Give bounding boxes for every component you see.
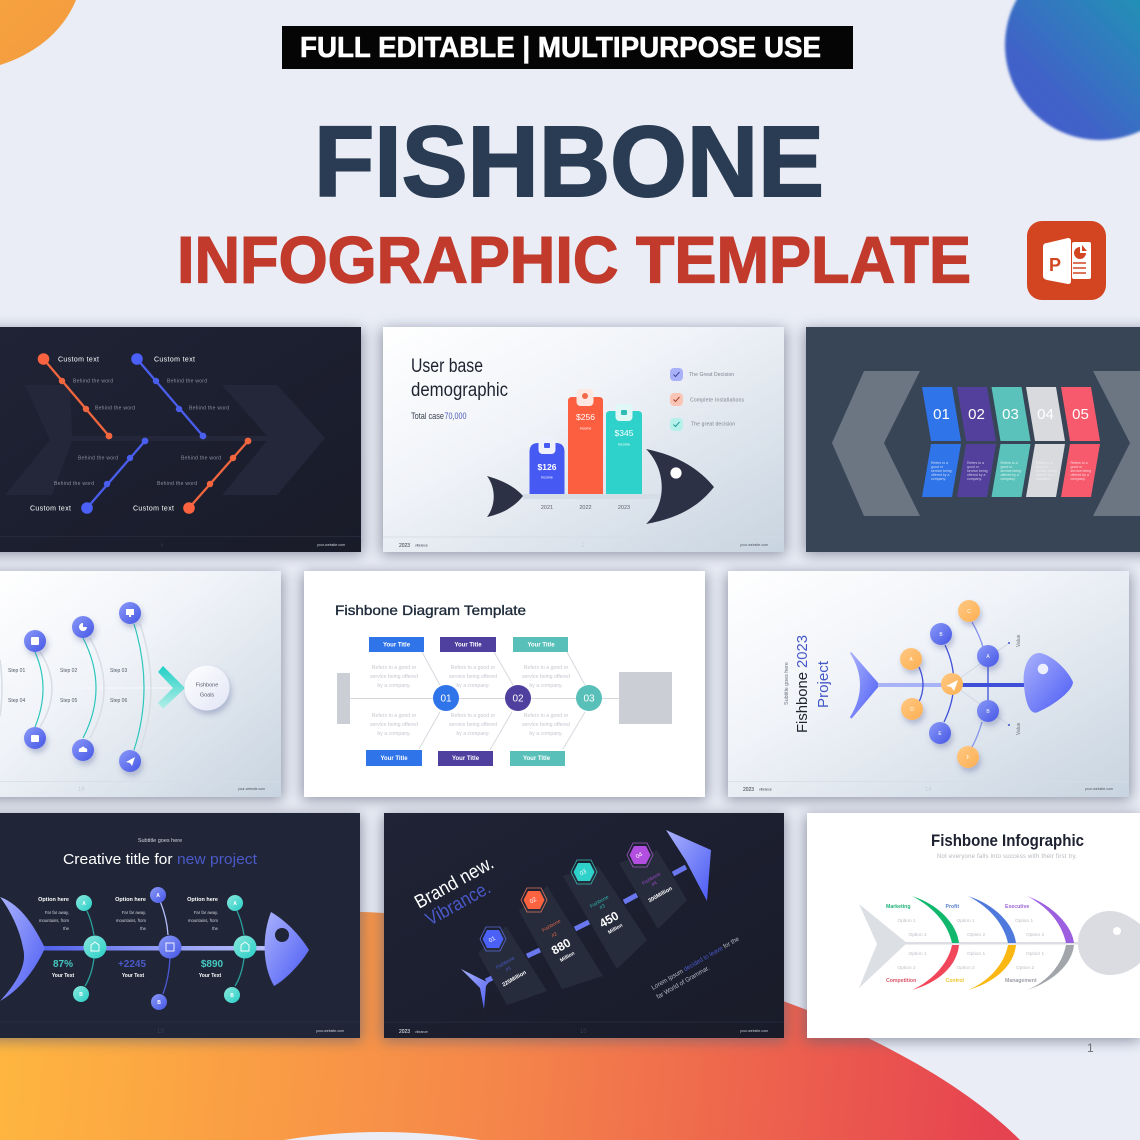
top blue bone: Custom text	[154, 356, 195, 364]
legend	[670, 368, 744, 431]
heading: Fishbone Diagram Template	[335, 602, 526, 618]
category labels: Executive	[1005, 904, 1029, 910]
step 04: offered by a	[1036, 473, 1054, 477]
description text: service being offered	[449, 722, 497, 728]
spine	[878, 683, 1024, 687]
step 04: 04	[1037, 406, 1054, 423]
step 03: 03	[1002, 406, 1019, 423]
arrow tail	[461, 969, 492, 1009]
letter nodes: B	[986, 709, 990, 715]
fish spine	[523, 494, 663, 499]
description text: service being offered	[370, 674, 418, 680]
card labels	[495, 871, 674, 988]
step 01: company.	[931, 477, 946, 481]
heading: Fishbone Infographic	[931, 831, 1084, 850]
top blue bone	[131, 353, 229, 439]
heading: Vibrance.	[422, 878, 495, 930]
metrics: 87%	[53, 959, 73, 970]
spine	[905, 942, 1080, 944]
options text	[38, 897, 219, 931]
footer	[384, 1022, 784, 1035]
heading: Brand new.	[411, 853, 498, 913]
value markers: Value	[1016, 634, 1022, 647]
options text: mountains, from	[188, 918, 219, 923]
step 01: good or	[931, 465, 944, 469]
description text: service being offered	[522, 674, 570, 680]
value markers	[1008, 634, 1022, 735]
hexagon nodes	[480, 843, 653, 951]
rotated heading	[784, 635, 832, 733]
rotated heading: Fishbone 2023	[794, 635, 811, 733]
top blue bone: Behind the word	[167, 378, 207, 384]
step 02: company.	[967, 477, 982, 481]
card labels: #1	[505, 965, 513, 973]
number nodes	[433, 685, 602, 711]
option labels: Option 1	[908, 951, 927, 957]
hexagon nodes: 03	[579, 869, 588, 877]
tail block	[337, 673, 350, 724]
bottom blue bone: Behind the word	[78, 456, 118, 462]
option labels: Option 1	[1026, 951, 1044, 957]
decoration: top-left orange blob	[0, 0, 76, 65]
footer: 2	[582, 543, 586, 549]
heading: demographic	[411, 380, 508, 401]
bar chart: $345	[615, 428, 634, 438]
panel: dark fishbone with custom text	[0, 327, 361, 552]
left chevron	[832, 371, 920, 516]
legend: Complete Installations	[690, 398, 744, 404]
panel: fishbone goals steps	[0, 571, 281, 797]
title boxes: Your Title	[454, 642, 482, 648]
decoration: bottom white arc	[284, 1132, 480, 1140]
footer: your-website.com	[238, 787, 265, 791]
option labels: Option 1	[1015, 918, 1033, 924]
number nodes: 02	[512, 694, 524, 704]
step 03: service being	[1000, 469, 1021, 473]
bottom orange bone: Behind the word	[181, 456, 221, 462]
category labels: Profit	[946, 904, 959, 910]
heading: Total case	[411, 411, 444, 422]
description text: by a company.	[529, 731, 563, 737]
icon glyphs	[31, 609, 135, 766]
bar chart	[530, 389, 642, 511]
options text: mountains, from	[39, 918, 70, 923]
option labels: Option 1	[898, 918, 916, 924]
description text: by a company.	[377, 731, 411, 737]
panel: chevron steps	[806, 327, 1140, 552]
step 03	[992, 387, 1030, 497]
footer: your-website.com	[740, 543, 768, 547]
card labels: Fishbone	[495, 955, 516, 971]
step 03: Refers to a	[1000, 461, 1018, 465]
panel: fishbone 2023 project	[728, 571, 1129, 797]
options text: the	[140, 926, 147, 931]
metrics: Your Text	[52, 973, 74, 979]
legend: The Great Decision	[689, 372, 734, 378]
option labels: Option 1	[967, 951, 985, 957]
step 05: company.	[1070, 477, 1085, 481]
letter nodes	[900, 600, 999, 768]
legend: The great decision	[691, 422, 735, 428]
top orange bone: Custom text	[58, 356, 99, 364]
node icons	[91, 942, 249, 951]
options text: Option here	[38, 897, 69, 903]
card labels: 225Million	[501, 970, 528, 988]
step labels: Step 04	[8, 698, 25, 704]
footer: your-website.com	[317, 543, 345, 547]
heading	[411, 356, 508, 422]
card labels: #3	[599, 903, 607, 911]
card labels: Million	[607, 923, 624, 936]
panel: fishbone infographic	[807, 813, 1140, 1038]
footer: your-website.com	[740, 1029, 768, 1033]
rotated heading: Subtitle goes here	[784, 662, 790, 705]
footer: your-website.com	[316, 1029, 344, 1033]
footer: vibrance	[759, 788, 772, 792]
description text: by a company.	[377, 683, 411, 689]
step 04: service being	[1036, 469, 1057, 473]
footer: 8	[161, 542, 164, 547]
nodes: A	[82, 901, 86, 907]
bar chart: 2023	[618, 505, 630, 511]
footer	[383, 537, 784, 549]
options text: the	[63, 926, 70, 931]
footer	[0, 782, 281, 793]
step 04: good or	[1036, 465, 1049, 469]
icon circles	[24, 602, 141, 772]
step 05: offered by a	[1070, 473, 1089, 477]
metrics: Your Text	[199, 973, 221, 979]
title boxes	[366, 637, 568, 766]
background chevrons	[5, 385, 325, 495]
heading	[931, 831, 1084, 860]
step 01	[922, 387, 961, 497]
footer: 2023	[399, 543, 410, 549]
step 02: Refers to a	[967, 461, 984, 465]
metrics: Your Text	[122, 973, 144, 979]
options text: Far far away,	[45, 910, 69, 915]
options text: the	[212, 926, 219, 931]
card labels: #2	[551, 931, 559, 939]
fish head	[646, 449, 714, 524]
step labels: Step 01	[8, 668, 25, 674]
decoration: bottom orange wave	[0, 912, 1020, 1140]
step 03: good or	[1000, 465, 1013, 469]
category labels: Competition	[886, 978, 916, 984]
bar chart: 2021	[541, 505, 553, 511]
ghost arcs	[0, 624, 151, 750]
icon: PowerPoint: P	[1049, 255, 1061, 275]
description text: by a company.	[529, 683, 563, 689]
heading	[411, 853, 498, 930]
step 05: good or	[1070, 465, 1083, 469]
cards	[478, 850, 687, 1005]
option labels: Option 2	[1026, 932, 1044, 938]
options text: mountains, from	[116, 918, 147, 923]
letter nodes: A	[986, 654, 990, 660]
bottom blue bone	[30, 438, 148, 514]
step 04: company.	[1036, 477, 1051, 481]
step 03: company.	[1000, 477, 1015, 481]
title boxes: Your Title	[380, 756, 408, 762]
bottom blue bone: Custom text	[30, 506, 71, 512]
bottom blue bone: Behind the word	[54, 481, 94, 487]
decoration: top-right gradient circle	[1005, 0, 1140, 140]
rotated heading: Project	[815, 660, 832, 708]
goals circle: Goals	[200, 692, 214, 698]
category labels: Management	[1005, 978, 1037, 984]
step 02: 02	[968, 406, 985, 423]
option labels: Option 1	[956, 918, 975, 924]
hexagon nodes: 01	[488, 936, 497, 944]
spine	[0, 687, 185, 689]
letter nodes: F	[966, 755, 970, 761]
panel shadows	[0, 329, 1140, 1041]
footer: 10	[580, 1029, 587, 1035]
option labels: Option 2	[908, 932, 927, 938]
bones	[919, 622, 1009, 747]
panel: user base demographic	[383, 327, 784, 552]
description text: Refers to a good or	[524, 713, 568, 719]
arrow head	[666, 830, 711, 901]
step 01: 01	[933, 406, 950, 423]
metrics: $890	[201, 959, 224, 970]
heading: Not everyone falls into success with their first try.	[937, 854, 1077, 860]
description text	[370, 665, 570, 737]
card labels: Fishbone	[589, 894, 610, 910]
title boxes: Your Title	[383, 642, 411, 648]
title: FISHBONE	[314, 106, 824, 218]
card labels: Fishbone	[541, 918, 562, 934]
metrics	[52, 959, 224, 979]
spine	[44, 946, 266, 950]
top orange bone: Behind the word	[95, 406, 135, 412]
hexagon nodes: 04	[635, 852, 644, 860]
step 05	[1061, 387, 1100, 497]
step 03: offered by a	[1000, 473, 1019, 477]
bar chart: Income	[541, 476, 553, 480]
bar chart: 2022	[579, 505, 592, 511]
option labels: Option 2	[898, 965, 916, 971]
fish tail	[859, 904, 907, 988]
category labels	[886, 904, 1037, 984]
right chevron	[1093, 371, 1140, 516]
panel: creative title fishbone	[0, 813, 360, 1038]
letter nodes: D	[910, 707, 914, 713]
heading: User base	[411, 356, 483, 377]
fish tail	[850, 652, 880, 718]
option labels: Option 2	[956, 965, 975, 971]
fish head	[265, 912, 309, 986]
option labels	[898, 918, 1044, 971]
bottom orange bone: Custom text	[133, 506, 174, 512]
value markers: Value	[1016, 722, 1022, 735]
step 02: good or	[967, 465, 980, 469]
header banner: FULL EDITABLE | MULTIPURPOSE USE	[300, 32, 821, 64]
bottom orange bone: Behind the word	[157, 481, 197, 487]
card labels: 880	[549, 935, 573, 958]
title boxes: Your Title	[527, 642, 555, 648]
crescents	[912, 896, 1074, 990]
description text: Refers to a good or	[451, 665, 495, 671]
step 02: service being	[967, 469, 988, 473]
step 01: service being	[931, 469, 952, 473]
step labels: Step 03	[110, 668, 127, 674]
nodes: B	[79, 992, 83, 998]
step 05: service being	[1070, 469, 1091, 473]
top orange bone	[38, 353, 135, 439]
footer	[0, 536, 361, 547]
step labels: Step 06	[110, 698, 127, 704]
description text: service being offered	[522, 722, 570, 728]
nodes	[73, 887, 256, 1010]
footer: 2023	[399, 1029, 410, 1035]
step 01: offered by a	[931, 473, 949, 477]
title boxes: Your Title	[452, 756, 480, 762]
footer: your-website.com	[1085, 787, 1113, 791]
number nodes: 01	[440, 694, 452, 704]
description text: Refers to a good or	[372, 713, 416, 719]
step 05: Refers to a	[1070, 461, 1088, 465]
footer: 16	[78, 787, 85, 793]
description text: Refers to a good or	[524, 665, 568, 671]
nodes: A	[233, 901, 237, 907]
subtitle: INFOGRAPHIC TEMPLATE	[177, 222, 971, 296]
nodes: B	[157, 1000, 161, 1006]
step 04	[1026, 387, 1065, 497]
bottom orange bone	[133, 438, 251, 514]
teal arcs	[35, 624, 144, 750]
card labels: Fishbone	[641, 871, 662, 887]
letter nodes: B	[939, 632, 943, 638]
bones	[85, 901, 244, 994]
step labels: Step 02	[60, 668, 77, 674]
step 05: 05	[1072, 406, 1089, 423]
goals circle	[184, 666, 230, 710]
footer	[728, 782, 1129, 793]
letter nodes: C	[967, 609, 971, 615]
description text: Refers to a good or	[451, 713, 495, 719]
options text: Far far away,	[194, 910, 218, 915]
footer: 14	[925, 787, 932, 793]
metrics: +2245	[118, 959, 146, 970]
category labels: Control	[946, 978, 964, 984]
panel: fishbone diagram template	[304, 571, 705, 797]
nodes: A	[156, 893, 160, 899]
fish head	[1024, 653, 1073, 713]
options text: Far far away,	[122, 910, 146, 915]
icon: PowerPoint	[1027, 221, 1106, 300]
number nodes: 03	[583, 694, 595, 704]
option labels: Option 2	[1016, 965, 1034, 971]
card labels: 300Million	[647, 886, 674, 904]
bar chart: Income	[618, 442, 630, 446]
hexagon nodes: 02	[529, 897, 538, 905]
footer: 13	[157, 1029, 164, 1035]
step 01: Refers to a	[931, 461, 948, 465]
step 02: offered by a	[967, 473, 985, 477]
card labels: #4	[651, 880, 659, 888]
title boxes: Your Title	[523, 756, 551, 762]
heading: Subtitle goes here	[138, 838, 182, 844]
centre node	[941, 673, 963, 695]
description text: service being offered	[449, 674, 497, 680]
top blue bone: Behind the word	[189, 406, 229, 412]
fish head	[1078, 911, 1140, 975]
category labels: Marketing	[886, 904, 911, 910]
fish tail	[487, 476, 523, 517]
letter nodes: E	[938, 731, 942, 737]
step 04: Refers to a	[1036, 461, 1053, 465]
bar chart: Income	[580, 426, 591, 430]
step labels	[8, 668, 127, 704]
letter nodes: A	[909, 657, 913, 663]
step 02	[957, 387, 996, 497]
description text: by a company.	[456, 683, 490, 689]
connectors	[486, 867, 686, 981]
head block	[619, 672, 672, 724]
option labels: Option 2	[967, 932, 985, 938]
arrow	[158, 666, 185, 709]
description text: by a company.	[456, 731, 490, 737]
description: Lorem Ipsum decided to leave for the	[650, 935, 741, 992]
heading: Creative title for new project	[63, 851, 258, 868]
fish tail	[0, 897, 45, 1001]
card labels: 450	[597, 908, 621, 931]
bar chart: $126	[538, 462, 557, 472]
goals circle: Fishbone	[196, 682, 218, 688]
skeleton lines	[350, 652, 619, 750]
page number: 1	[1087, 1041, 1094, 1055]
description text: Refers to a good or	[372, 665, 416, 671]
card labels: Million	[559, 951, 576, 964]
footer: 2023	[743, 787, 754, 793]
footer	[0, 1022, 360, 1035]
heading: 70,000	[444, 411, 466, 422]
description: far World of Grammar.	[656, 965, 711, 1001]
footer: vibrance	[415, 1030, 428, 1034]
panel: brand new vibrance	[384, 813, 784, 1038]
bar chart: $256	[576, 412, 595, 422]
options text: Option here	[187, 897, 218, 903]
heading	[63, 838, 258, 868]
footer: vibrance	[415, 544, 428, 548]
nodes: B	[230, 993, 234, 999]
description text: service being offered	[370, 722, 418, 728]
options text: Option here	[115, 897, 146, 903]
step labels: Step 05	[60, 698, 77, 704]
top orange bone: Behind the word	[73, 378, 113, 384]
